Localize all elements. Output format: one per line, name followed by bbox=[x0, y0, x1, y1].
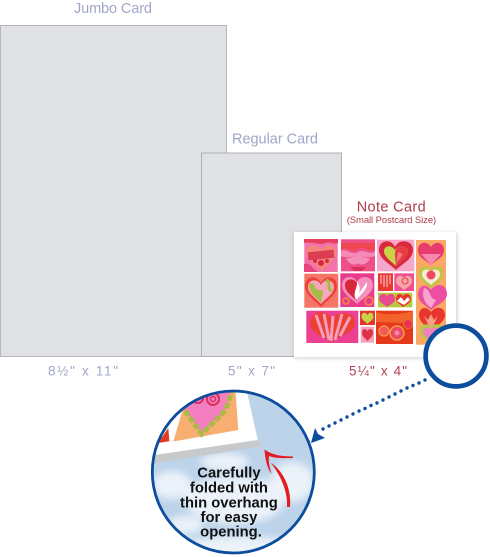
heart tile: top left bbox=[304, 239, 338, 272]
callout text: Carefully bbox=[197, 466, 261, 482]
orange heart panel bbox=[173, 392, 238, 442]
magnifier ring on card corner bbox=[426, 326, 486, 386]
regular card label: Regular Card bbox=[232, 132, 318, 148]
tiny tiles: green heart and pink heart bbox=[360, 311, 375, 343]
red curved arrow bbox=[264, 450, 293, 507]
wide heart tile: bottom left bbox=[306, 311, 358, 343]
regular card rectangle bbox=[202, 153, 342, 356]
small tiles: red and pink bbox=[378, 273, 414, 291]
dotted arrow from ring to detail circle bbox=[311, 378, 427, 443]
callout text: opening. bbox=[200, 524, 262, 540]
dimension label: note card: 5¼" x 4" bbox=[349, 364, 407, 378]
circles tile: bottom centre bbox=[376, 311, 413, 344]
callout text: folded with bbox=[190, 480, 268, 496]
dimension label: regular: 5" x 7" bbox=[228, 364, 275, 378]
note card with heart artwork bbox=[294, 232, 457, 358]
jumbo card label: Jumbo Card bbox=[74, 1, 152, 17]
clouds bbox=[152, 453, 314, 557]
detail circle ring bbox=[152, 391, 314, 553]
grey overhang strip bbox=[150, 440, 263, 464]
heart tile: top right bbox=[377, 240, 414, 271]
callout text: thin overhang bbox=[180, 496, 278, 512]
note card label: Note Card bbox=[357, 200, 426, 216]
red panel sliver bbox=[158, 428, 169, 443]
pink heart with green border bbox=[183, 392, 234, 438]
heart strip: tall right column bbox=[416, 240, 447, 345]
heart tile: middle left bbox=[304, 274, 338, 308]
note card sublabel: (Small Postcard Size) bbox=[347, 215, 436, 226]
wide green tile bbox=[378, 293, 412, 307]
heart tile: top middle bbox=[341, 239, 375, 271]
heart tile: middle centre bbox=[340, 273, 374, 307]
jumbo card rectangle bbox=[0, 26, 226, 356]
dimension label: jumbo: 8½" x 11" bbox=[48, 364, 118, 378]
folded card front bbox=[156, 392, 258, 455]
detail circle: folded overhang bbox=[154, 392, 313, 552]
callout text: for easy bbox=[201, 510, 258, 526]
